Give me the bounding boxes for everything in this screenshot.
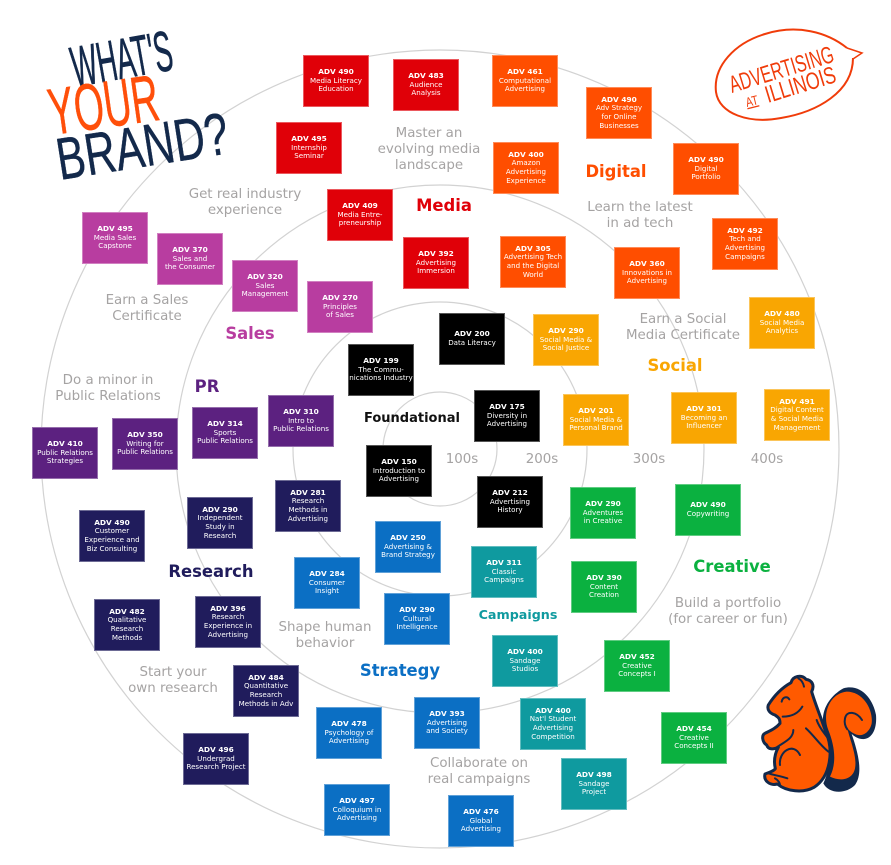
course: ADV 390 Content Creation: Creation — [589, 590, 619, 599]
course: ADV 496 Undergrad Research Project: Undergrad — [197, 754, 235, 763]
text: Shape human behavior: behavior — [296, 636, 354, 651]
course: ADV 452 Creative Concepts I: Creative — [622, 661, 652, 670]
course: ADV 452 Creative Concepts I: Concepts I — [618, 669, 656, 678]
course: ADV 290 Cultural Intelligence: Cultural — [403, 614, 431, 623]
course: ADV 484 Quantitative Research Methods in Adv — [233, 665, 299, 717]
course: ADV 480 Social Media Analytics: ADV 480 — [764, 309, 800, 318]
course: ADV 270 Principles of Sales: ADV 270 — [322, 293, 358, 302]
course: ADV 483 Audience Analysis: Audience — [410, 80, 442, 89]
course: ADV 290 Independent Study in Research — [187, 497, 253, 549]
course: ADV 212 Advertising History: Advertising — [490, 497, 530, 506]
course: ADV 314 Sports Public Relations: ADV 314 — [207, 419, 243, 428]
course: ADV 490 Digital Portfolio — [673, 143, 739, 195]
course: ADV 301 Becoming an Influencer: Becoming an — [681, 413, 727, 422]
course: ADV 212 Advertising History — [477, 476, 543, 528]
course: ADV 310 Intro to Public Relations: Public Relations — [273, 424, 329, 433]
course: ADV 400 Amazon Advertising Experience: Experience — [506, 176, 546, 185]
course: ADV 483 Audience Analysis: Analysis — [411, 88, 441, 97]
course: ADV 400 Sandage Studios — [492, 635, 558, 687]
course: ADV 270 Principles of Sales — [307, 281, 373, 333]
course: ADV 490 Adv Strategy for Online Businesses: ADV 490 — [601, 95, 637, 104]
course: ADV 496 Undergrad Research Project — [183, 733, 249, 785]
heading: Sales: Sales — [225, 324, 275, 343]
course: ADV 495 Media Sales Capstone — [82, 212, 148, 264]
course: ADV 150 Introduction to Advertising — [366, 445, 432, 497]
course: ADV 480 Social Media Analytics — [749, 297, 815, 349]
course: ADV 270 Principles of Sales: of Sales — [326, 310, 354, 319]
course: ADV 290 Independent Study in Research: Research — [204, 531, 236, 540]
text: Get real industry experience: Get real industry — [189, 187, 301, 202]
course: ADV 290 Cultural Intelligence: ADV 290 — [399, 605, 435, 614]
course: ADV 290 Independent Study in Research: Independent — [198, 513, 242, 522]
course: ADV 400 Amazon Advertising Experience — [493, 142, 559, 194]
heading: Digital: Digital — [585, 162, 647, 181]
course: ADV 212 Advertising History: History — [497, 505, 523, 514]
course: ADV 150 Introduction to Advertising: Introduction to — [373, 466, 425, 475]
heading: Creative: Creative — [693, 557, 771, 576]
course: ADV 314 Sports Public Relations: Public Relations — [197, 436, 253, 445]
course: ADV 498 Sandage Project: Project — [582, 787, 606, 796]
course: ADV 454 Creative Concepts II: Creative — [679, 733, 709, 742]
course: ADV 461 Computational Advertising: Advertising — [505, 84, 545, 93]
course: ADV 492 Tech and Advertising Campaigns — [712, 218, 778, 270]
text: Start your own research: own research — [128, 681, 218, 696]
course: ADV 393 Advertising and Society: Advertising — [427, 718, 467, 727]
course: ADV 200 Data Literacy: Data Literacy — [448, 338, 496, 347]
course: ADV 484 Quantitative Research Methods in Adv: Methods in Adv — [239, 699, 293, 708]
course: ADV 360 Innovations in Advertising: Advertising — [627, 276, 667, 285]
course: ADV 281 Research Methods in Advertising: Advertising — [288, 514, 328, 523]
heading: Campaigns: Campaigns — [479, 607, 557, 622]
logo: Advertising at Illinois: AT — [744, 93, 760, 110]
course: ADV 454 Creative Concepts II: ADV 454 — [676, 724, 712, 733]
text: Earn a Social Media Certificate: Media Certificate — [626, 328, 740, 343]
course: ADV 483 Audience Analysis — [393, 59, 459, 111]
level label: 100s: 100s — [446, 452, 478, 467]
course: ADV 320 Sales Management: Management — [242, 289, 288, 298]
course: ADV 290 Independent Study in Research: Study in — [205, 522, 235, 531]
course: ADV 497 Colloquium in Advertising: ADV 497 — [339, 796, 375, 805]
text: Earn a Sales Certificate: Earn a Sales — [106, 293, 188, 308]
course: ADV 476 Global Advertising: Global — [470, 816, 492, 825]
course: ADV 284 Consumer Insight — [294, 557, 360, 609]
text: Build a portfolio (for career or fun): Build a portfolio — [675, 596, 781, 611]
heading: Foundational: Foundational — [364, 411, 460, 426]
course: ADV 290 Social Media & Social Justice: Social Justice — [543, 343, 589, 352]
course: ADV 370 Sales and the Consumer: ADV 370 — [172, 245, 208, 254]
course: ADV 400 Amazon Advertising Experience: Amazon — [512, 158, 540, 167]
heading: Social: Social — [647, 356, 703, 375]
text: Master an evolving media landscape: Master an — [396, 126, 462, 141]
heading: Media: Media — [416, 196, 472, 215]
course: ADV 452 Creative Concepts I: ADV 452 — [619, 652, 655, 661]
course: ADV 490 Media Literacy Education: Education — [318, 84, 354, 93]
text: Learn the latest in ad tech: Learn the latest — [587, 200, 693, 215]
heading: PR: PR — [195, 377, 219, 396]
level label: 400s: 400s — [751, 452, 783, 467]
course: ADV 311 Classic Campaigns: Classic — [492, 567, 516, 576]
course: ADV 310 Intro to Public Relations: Intro to — [288, 416, 314, 425]
course: ADV 150 Introduction to Advertising: Advertising — [379, 474, 419, 483]
course: ADV 290 Adventures in Creative: ADV 290 — [585, 499, 621, 508]
course: ADV 497 Colloquium in Advertising: Colloquium in — [333, 805, 381, 814]
course: ADV 498 Sandage Project: ADV 498 — [576, 770, 612, 779]
course: ADV 290 Adventures in Creative — [570, 487, 636, 539]
course: ADV 490 Adv Strategy for Online Businesses: for Online — [602, 112, 636, 121]
course: ADV 400 Nat'l Student Advertising Competition: Advertising — [533, 723, 573, 732]
course: ADV 498 Sandage Project — [561, 758, 627, 810]
title: What's Your Brand? — [44, 20, 233, 192]
course: ADV 301 Becoming an Influencer: ADV 301 — [686, 404, 722, 413]
course: ADV 284 Consumer Insight: Consumer — [309, 578, 345, 587]
course: ADV 400 Sandage Studios: Studios — [512, 664, 538, 673]
course: ADV 392 Advertising Immersion: Advertising — [416, 258, 456, 267]
level label: 200s: 200s — [526, 452, 558, 467]
course: ADV 491 Digital Content & Social Media Management — [764, 389, 830, 441]
course: ADV 490 Media Literacy Education: ADV 490 — [318, 67, 354, 76]
course: ADV 495 Media Sales Capstone: Media Sales — [94, 233, 136, 242]
course: ADV 496 Undergrad Research Project: ADV 496 — [198, 745, 234, 754]
text: Collaborate on real campaigns: Collaborate on — [430, 756, 528, 771]
course: ADV 410 Public Relations Strategies: Public Relations — [37, 448, 93, 457]
course: ADV 200 Data Literacy — [439, 313, 505, 365]
course: ADV 482 Qualitative Research Methods — [94, 599, 160, 651]
course: ADV 320 Sales Management — [232, 260, 298, 312]
course: ADV 476 Global Advertising: ADV 476 — [463, 807, 499, 816]
course: ADV 454 Creative Concepts II: Concepts II — [674, 741, 714, 750]
text: Build a portfolio (for career or fun) — [668, 596, 788, 627]
course: ADV 495 Internship Seminar: Seminar — [294, 151, 324, 160]
course: ADV 370 Sales and the Consumer: the Consumer — [165, 262, 215, 271]
course: ADV 409 Media Entrepreneurship — [327, 189, 393, 241]
course: ADV 480 Social Media Analytics: Analytics — [766, 326, 798, 335]
course: ADV 484 Quantitative Research Methods in Adv: Quantitative — [244, 681, 288, 690]
course: ADV 497 Colloquium in Advertising: Advertising — [337, 813, 377, 822]
course: ADV 250 Advertising & Brand Strategy: ADV 250 — [390, 533, 426, 542]
course: ADV 281 Research Methods in Advertising — [275, 480, 341, 532]
course: ADV 492 Tech and Advertising Campaigns: Advertising — [725, 243, 765, 252]
course: ADV 400 Nat'l Student Advertising Competition — [520, 698, 586, 750]
course: ADV 400 Nat'l Student Advertising Competition: ADV 400 — [535, 706, 571, 715]
course: ADV 396 Research Experience in Advertising — [195, 596, 261, 648]
course: ADV 492 Tech and Advertising Campaigns: Tech and — [729, 234, 761, 243]
course: ADV 301 Becoming an Influencer — [671, 392, 737, 444]
course: ADV 290 Cultural Intelligence — [384, 593, 450, 645]
text: Collaborate on real campaigns: real campaigns — [428, 772, 530, 787]
text: Start your own research: Start your — [139, 665, 207, 680]
course: ADV 310 Intro to Public Relations: ADV 310 — [283, 407, 319, 416]
course: ADV 305 Advertising Tech and the Digital World: World — [523, 270, 543, 279]
course: ADV 400 Sandage Studios: ADV 400 — [507, 647, 543, 656]
course: ADV 393 Advertising and Society: and Society — [426, 726, 468, 735]
course: ADV 461 Computational Advertising — [492, 55, 558, 107]
course: ADV 250 Advertising & Brand Strategy: Advertising & — [384, 542, 432, 551]
course: ADV 311 Classic Campaigns: ADV 311 — [486, 558, 522, 567]
course: ADV 409 Media Entrepreneurship: preneurship — [339, 218, 381, 227]
course: ADV 396 Research Experience in Advertising: Research — [212, 612, 244, 621]
course: ADV 496 Undergrad Research Project: Research Project — [186, 762, 246, 771]
text: Shape human behavior — [279, 620, 371, 651]
course: ADV 350 Writing for Public Relations — [112, 418, 178, 470]
course: ADV 452 Creative Concepts I — [604, 640, 670, 692]
title: What's Your Brand?: BRAND? — [52, 100, 233, 192]
course: ADV 498 Sandage Project: Sandage — [578, 779, 610, 788]
course: ADV 305 Advertising Tech and the Digital World: and the Digital — [507, 261, 559, 270]
course: ADV 476 Global Advertising: Advertising — [461, 824, 501, 833]
course: ADV 392 Advertising Immersion — [403, 237, 469, 289]
course: ADV 409 Media Entrepreneurship: Media Entre- — [337, 210, 382, 219]
course: ADV 478 Psychology of Advertising: ADV 478 — [331, 719, 367, 728]
logo: Advertising at Illinois — [714, 28, 864, 121]
course: ADV 490 Digital Portfolio: ADV 490 — [688, 155, 724, 164]
text: Build a portfolio (for career or fun): (for career or fun) — [668, 612, 788, 627]
course: ADV 497 Colloquium in Advertising — [324, 784, 390, 836]
course: ADV 175 Diversity in Advertising: ADV 175 — [489, 402, 525, 411]
course: ADV 281 Research Methods in Advertising: Methods in — [288, 505, 328, 514]
course: ADV 390 Content Creation: ADV 390 — [586, 573, 622, 582]
course: ADV 495 Internship Seminar — [276, 122, 342, 174]
course: ADV 400 Amazon Advertising Experience: Advertising — [506, 167, 546, 176]
logo: Advertising at Illinois: ADVERTISING — [726, 42, 837, 99]
course: ADV 495 Media Sales Capstone: ADV 495 — [97, 224, 133, 233]
course: ADV 492 Tech and Advertising Campaigns: ADV 492 — [727, 226, 763, 235]
course: ADV 150 Introduction to Advertising: ADV 150 — [381, 457, 417, 466]
course: ADV 490 Customer Experience and Biz Consulting: Biz Consulting — [87, 544, 137, 553]
course: ADV 490 Customer Experience and Biz Consulting — [79, 510, 145, 562]
text: Get real industry experience — [189, 187, 301, 218]
course: ADV 305 Advertising Tech and the Digital World: ADV 305 — [515, 244, 551, 253]
course: ADV 175 Diversity in Advertising: Diversity in — [487, 411, 527, 420]
course: ADV 199 The Communications Industry: nications Industry — [349, 373, 413, 382]
course: ADV 201 Social Media & Personal Brand — [563, 394, 629, 446]
course: ADV 311 Classic Campaigns — [471, 546, 537, 598]
course: ADV 390 Content Creation: Content — [590, 582, 618, 591]
course: ADV 350 Writing for Public Relations: Public Relations — [117, 447, 173, 456]
course: ADV 400 Sandage Studios: Sandage — [509, 656, 541, 665]
text: Earn a Sales Certificate: Certificate — [112, 309, 182, 324]
course: ADV 350 Writing for Public Relations: Writing for — [126, 439, 164, 448]
course: ADV 482 Qualitative Research Methods: Qualitative — [108, 615, 146, 624]
course: ADV 270 Principles of Sales: Principles — [323, 302, 357, 311]
course: ADV 290 Social Media & Social Justice: Social Media & — [540, 335, 592, 344]
course: ADV 478 Psychology of Advertising — [316, 707, 382, 759]
course: ADV 484 Quantitative Research Methods in Adv: Research — [250, 690, 282, 699]
course: ADV 400 Nat'l Student Advertising Competition: Nat'l Student — [530, 714, 576, 723]
course: ADV 290 Cultural Intelligence: Intelligence — [396, 622, 438, 631]
text: Do a minor in Public Relations: Do a minor in — [63, 373, 153, 388]
course: ADV 360 Innovations in Advertising: Innovations in — [622, 268, 672, 277]
course: ADV 410 Public Relations Strategies — [32, 427, 98, 479]
course: ADV 400 Nat'l Student Advertising Competition: Competition — [531, 732, 575, 741]
course: ADV 490 Customer Experience and Biz Consulting: ADV 490 — [94, 518, 130, 527]
course: ADV 476 Global Advertising — [448, 795, 514, 847]
course: ADV 311 Classic Campaigns: Campaigns — [484, 575, 524, 584]
course: ADV 305 Advertising Tech and the Digital World: Advertising Tech — [504, 252, 562, 261]
logo: Advertising at Illinois: ILLINOIS — [762, 62, 839, 108]
text: Master an evolving media landscape: evolving media — [378, 142, 480, 157]
course: ADV 175 Diversity in Advertising — [474, 390, 540, 442]
course: ADV 490 Copywriting: Copywriting — [687, 509, 729, 518]
course: ADV 478 Psychology of Advertising: Advertising — [329, 736, 369, 745]
course: ADV 482 Qualitative Research Methods: ADV 482 — [109, 607, 145, 616]
heading: Strategy: Strategy — [360, 661, 440, 680]
course: ADV 490 Digital Portfolio: Digital — [694, 164, 718, 173]
course: ADV 320 Sales Management: ADV 320 — [247, 272, 283, 281]
course: ADV 290 Social Media & Social Justice — [533, 314, 599, 366]
course: ADV 461 Computational Advertising: Computational — [499, 76, 551, 85]
course: ADV 314 Sports Public Relations: Sports — [214, 428, 236, 437]
course: ADV 454 Creative Concepts II — [661, 712, 727, 764]
course: ADV 320 Sales Management: Sales — [256, 281, 274, 290]
course: ADV 305 Advertising Tech and the Digital World — [500, 236, 566, 288]
course: ADV 290 Adventures in Creative: in Creative — [584, 516, 622, 525]
course: ADV 393 Advertising and Society: ADV 393 — [429, 709, 465, 718]
course: ADV 281 Research Methods in Advertising: Research — [292, 496, 324, 505]
course: ADV 410 Public Relations Strategies: ADV 410 — [47, 439, 83, 448]
course: ADV 495 Internship Seminar: Internship — [291, 143, 327, 152]
course: ADV 201 Social Media & Personal Brand: Social Media & — [570, 415, 622, 424]
course: ADV 393 Advertising and Society — [414, 697, 480, 749]
course: ADV 360 Innovations in Advertising: ADV 360 — [629, 259, 665, 268]
text: Learn the latest in ad tech: in ad tech — [607, 216, 673, 231]
course: ADV 290 Social Media & Social Justice: ADV 290 — [548, 326, 584, 335]
course: ADV 490 Customer Experience and Biz Consulting: Experience and — [84, 535, 140, 544]
course: ADV 495 Internship Seminar: ADV 495 — [291, 134, 327, 143]
course: ADV 490 Adv Strategy for Online Businesses: Businesses — [599, 121, 639, 130]
course: ADV 310 Intro to Public Relations — [268, 395, 334, 447]
course: ADV 201 Social Media & Personal Brand: ADV 201 — [578, 406, 614, 415]
course: ADV 491 Digital Content & Social Media Management: Management — [774, 423, 820, 432]
heading: Research: Research — [168, 562, 254, 581]
course: ADV 392 Advertising Immersion: Immersion — [417, 266, 455, 275]
course: ADV 370 Sales and the Consumer — [157, 233, 223, 285]
course: ADV 492 Tech and Advertising Campaigns: Campaigns — [725, 252, 765, 261]
course: ADV 490 Media Literacy Education: Media Literacy — [310, 76, 362, 85]
course: ADV 284 Consumer Insight: Insight — [315, 586, 339, 595]
course: ADV 250 Advertising & Brand Strategy: Brand Strategy — [381, 550, 435, 559]
course: ADV 396 Research Experience in Advertising: Experience in — [204, 621, 252, 630]
course: ADV 400 Amazon Advertising Experience: ADV 400 — [508, 150, 544, 159]
text: Do a minor in Public Relations: Public Relations — [55, 389, 161, 404]
course: ADV 314 Sports Public Relations — [192, 407, 258, 459]
text: Get real industry experience: experience — [208, 203, 282, 218]
level label: 300s: 300s — [633, 452, 665, 467]
course: ADV 360 Innovations in Advertising — [614, 247, 680, 299]
text: Shape human behavior: Shape human — [279, 620, 371, 635]
course: ADV 290 Adventures in Creative: Adventures — [583, 508, 623, 517]
text: Start your own research — [128, 665, 218, 696]
course: ADV 250 Advertising & Brand Strategy — [375, 521, 441, 573]
course: ADV 284 Consumer Insight: ADV 284 — [309, 569, 345, 578]
course: ADV 212 Advertising History: ADV 212 — [492, 488, 528, 497]
course: ADV 409 Media Entrepreneurship: ADV 409 — [342, 201, 378, 210]
course: ADV 461 Computational Advertising: ADV 461 — [507, 67, 543, 76]
course: ADV 491 Digital Content & Social Media Management: ADV 491 — [779, 397, 815, 406]
title: What's Your Brand?: WHAT'S — [66, 20, 177, 100]
course: ADV 490 Customer Experience and Biz Consulting: Customer — [95, 526, 129, 535]
course: ADV 199 The Communications Industry — [348, 344, 414, 396]
title: What's Your Brand?: YOUR — [44, 61, 164, 150]
course: ADV 200 Data Literacy: ADV 200 — [454, 329, 490, 338]
course: ADV 490 Media Literacy Education — [303, 55, 369, 107]
text: Master an evolving media landscape — [378, 126, 480, 173]
course: ADV 491 Digital Content & Social Media Management: Digital Content — [770, 405, 824, 414]
course: ADV 478 Psychology of Advertising: Psychology of — [325, 728, 373, 737]
course: ADV 390 Content Creation — [571, 561, 637, 613]
course: ADV 370 Sales and the Consumer: Sales and — [173, 254, 207, 263]
text: Earn a Sales Certificate — [106, 293, 188, 324]
course: ADV 201 Social Media & Personal Brand: Personal Brand — [569, 423, 623, 432]
course: ADV 482 Qualitative Research Methods: Methods — [112, 633, 142, 642]
course: ADV 350 Writing for Public Relations: ADV 350 — [127, 430, 163, 439]
course: ADV 484 Quantitative Research Methods in Adv: ADV 484 — [248, 673, 284, 682]
course: ADV 396 Research Experience in Advertising: Advertising — [208, 630, 248, 639]
course: ADV 480 Social Media Analytics: Social Media — [760, 318, 804, 327]
text: Master an evolving media landscape: landscape — [395, 158, 463, 173]
course: ADV 490 Copywriting — [675, 484, 741, 536]
text: Earn a Social Media Certificate — [626, 312, 740, 343]
course: ADV 199 The Communications Industry: The Commu- — [358, 365, 404, 374]
icon: squirrel mascot — [761, 674, 876, 792]
course: ADV 410 Public Relations Strategies: Strategies — [47, 456, 83, 465]
course: ADV 483 Audience Analysis: ADV 483 — [408, 71, 444, 80]
course: ADV 290 Independent Study in Research: ADV 290 — [202, 505, 238, 514]
course: ADV 491 Digital Content & Social Media Management: & Social Media — [771, 414, 823, 423]
course: ADV 482 Qualitative Research Methods: Research — [111, 624, 143, 633]
course: ADV 490 Copywriting: ADV 490 — [690, 500, 726, 509]
text: Do a minor in Public Relations — [55, 373, 161, 404]
text: Earn a Social Media Certificate: Earn a Social — [640, 312, 726, 327]
text: Collaborate on real campaigns — [428, 756, 530, 787]
course: ADV 490 Adv Strategy for Online Businesses: Adv Strategy — [596, 103, 642, 112]
course: ADV 396 Research Experience in Advertising: ADV 396 — [210, 604, 246, 613]
course: ADV 281 Research Methods in Advertising: ADV 281 — [290, 488, 326, 497]
course: ADV 490 Adv Strategy for Online Businesses — [586, 87, 652, 139]
course: ADV 175 Diversity in Advertising: Advertising — [487, 419, 527, 428]
course: ADV 490 Digital Portfolio: Portfolio — [691, 172, 721, 181]
course: ADV 392 Advertising Immersion: ADV 392 — [418, 249, 454, 258]
text: Learn the latest in ad tech — [587, 200, 693, 231]
course: ADV 199 The Communications Industry: ADV 199 — [363, 356, 399, 365]
course: ADV 301 Becoming an Influencer: Influencer — [686, 421, 722, 430]
course: ADV 495 Media Sales Capstone: Capstone — [98, 241, 132, 250]
